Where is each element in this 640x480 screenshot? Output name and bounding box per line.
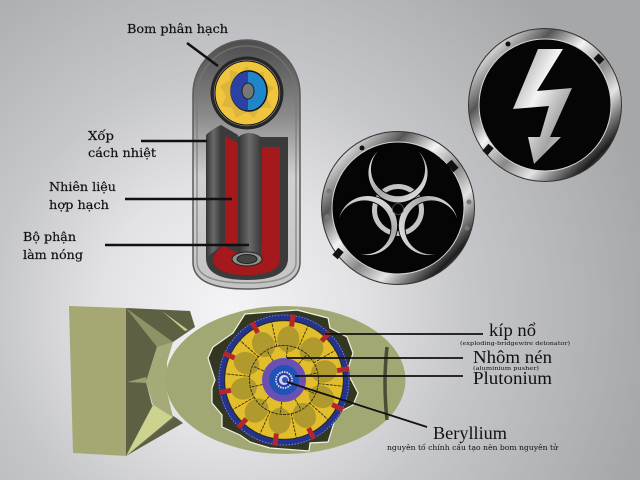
label: insulating foam: Xốp bbox=[88, 128, 114, 143]
label: aluminium pusher: Nhôm nén bbox=[473, 347, 552, 367]
fusion secondary cutaway bbox=[206, 125, 288, 280]
label: detonator: (exploding-bridgewire detonator) bbox=[460, 340, 570, 347]
label: insulating foam: cách nhiệt bbox=[88, 146, 156, 160]
label: fission bomb: Bom phân hạch bbox=[127, 22, 228, 36]
detonators bbox=[219, 314, 349, 446]
fission bomb sphere bbox=[210, 56, 284, 130]
label: beryllium: nguyên tố chính cấu tạo nên bom nguyên tử bbox=[387, 443, 559, 452]
icon: biohazard badge bbox=[322, 132, 474, 284]
capsule casing bbox=[193, 40, 300, 289]
label: detonator: kíp nổ bbox=[489, 320, 536, 340]
leader lines: capsule bbox=[105, 43, 249, 245]
implosion lens core bbox=[218, 314, 350, 446]
label: fusion fuel bbox=[49, 180, 116, 212]
label: heating part: làm nóng bbox=[23, 248, 83, 262]
label: detonator bbox=[460, 320, 570, 347]
label: aluminium pusher: (aluminium pusher) bbox=[473, 365, 539, 372]
label: heating part: Bộ phận bbox=[23, 230, 76, 244]
diagram: atomic bomb cutaway bbox=[69, 306, 406, 456]
bomb body bbox=[166, 306, 406, 454]
label: fusion fuel: Nhiên liệu bbox=[49, 180, 116, 194]
label: fusion fuel: hợp hạch bbox=[49, 198, 109, 212]
label: plutonium: Plutonium bbox=[473, 368, 552, 388]
icon: lightning badge bbox=[468, 28, 622, 182]
tail fins bbox=[69, 306, 195, 456]
label: insulating foam bbox=[88, 128, 156, 160]
label: beryllium bbox=[387, 423, 559, 452]
label: beryllium: Beryllium bbox=[433, 423, 507, 443]
diagram: fusion bomb capsule bbox=[193, 40, 300, 289]
label: heating part bbox=[23, 230, 83, 262]
outer shell bbox=[208, 310, 358, 451]
leader lines: atomic bomb bbox=[287, 334, 483, 427]
